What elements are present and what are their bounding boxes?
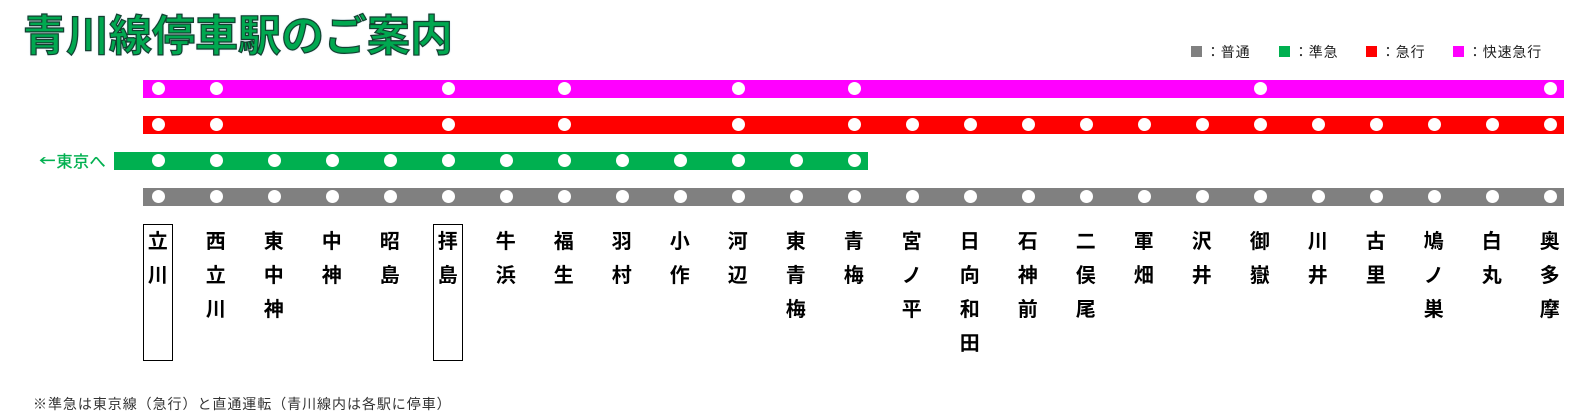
station names: 沢 [1192,231,1212,253]
footnote: ※準急は東京線（急行）と直通運転（青川線内は各駅に停車） [33,396,452,412]
station names: 東 [264,231,284,253]
station names: 石 [1018,231,1038,253]
station names: ノ [902,265,922,287]
station names: 浜 [496,265,516,287]
box: Tachikawa transfer [143,224,173,361]
express line [143,116,1564,134]
legend: semi-express: ：準急 [1294,44,1338,60]
box: Haijima transfer [433,224,463,361]
station names: 青 [786,265,806,287]
station names: 多 [1540,265,1560,287]
station names: 梅 [844,265,864,287]
station names: 島 [438,265,458,287]
station names: ノ [1424,265,1444,287]
station names: 巣 [1424,299,1444,321]
station names: 川 [206,299,226,321]
station names: 昭 [380,231,400,253]
station names: 神 [1018,265,1038,287]
semi-express line [114,152,868,170]
station names: 向 [960,265,980,287]
station names: 俣 [1076,265,1096,287]
station names: 川 [148,265,168,287]
station names: 軍 [1134,231,1154,253]
station names: 生 [554,265,574,287]
station names: 作 [670,265,690,287]
station names: 尾 [1076,299,1096,321]
station names: 奥 [1540,231,1560,253]
station names: 神 [322,265,342,287]
station names: 白 [1482,231,1502,253]
station names: 青 [844,231,864,253]
station names: 宮 [902,231,922,253]
rapid express line [143,80,1564,98]
legend [1191,44,1542,60]
station names: 中 [264,265,284,287]
station names: 和 [960,299,980,321]
station names: 井 [1308,265,1328,287]
to Tokyo label: ←東京へ [39,153,106,171]
legend: rapid express: ：快速急行 [1468,44,1542,60]
station names: 川 [1308,231,1328,253]
station names: 摩 [1540,299,1560,321]
station names: 福 [554,231,574,253]
station names: 村 [612,265,632,287]
station names: 羽 [612,231,632,253]
station names: 鳩 [1424,231,1444,253]
station names: 西 [206,231,226,253]
station names: 河 [728,231,748,253]
station names: 丸 [1482,265,1502,287]
station names: 立 [206,265,226,287]
station names: 二 [1076,231,1096,253]
station names: 神 [264,299,284,321]
legend: express: ：急行 [1381,44,1425,60]
legend: local: ：普通 [1206,44,1250,60]
title: 青川線停車駅のご案内 [23,13,453,61]
local line [143,188,1564,206]
station names: 井 [1192,265,1212,287]
station names: 東 [786,231,806,253]
station names: 立 [148,231,168,253]
station names: 嶽 [1250,265,1270,287]
station names: 中 [322,231,342,253]
station names: 梅 [786,299,806,321]
station names: 古 [1366,231,1386,253]
station names: 里 [1366,265,1386,287]
station names: 牛 [496,231,516,253]
station names: 前 [1018,299,1038,321]
station names: 田 [960,333,980,355]
station names: 日 [960,231,980,253]
station names: 小 [670,231,690,253]
station names: 拝 [438,231,458,253]
station names: 御 [1250,231,1270,253]
station names: 島 [380,265,400,287]
station names: 辺 [728,265,748,287]
station names: 畑 [1134,265,1154,287]
station names: 平 [902,299,922,321]
